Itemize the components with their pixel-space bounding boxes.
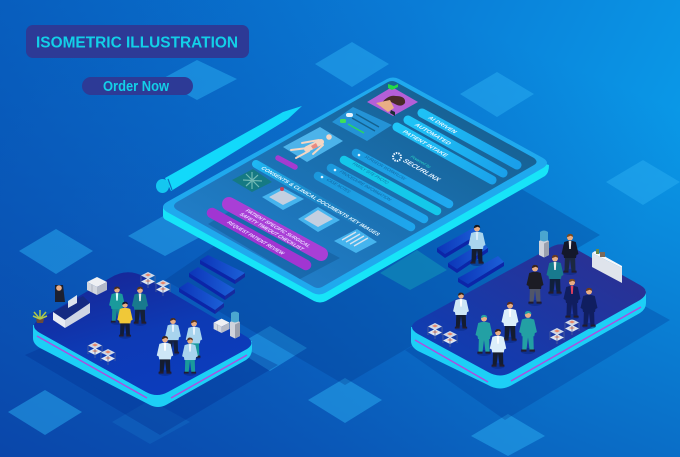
case notes bar: CASE NOTES [324,178,352,194]
securlinx logo [393,153,442,183]
cabinet [592,249,622,283]
consents bar [256,164,381,237]
right stairs [437,228,504,288]
body scan card [283,127,343,162]
AI driven bar [422,113,517,165]
family site photo bar: FAMILY SITE PHOTO [350,162,390,185]
patient intake bar [397,127,492,180]
request patient review bar: REQUEST PATIENT REVIEW [225,221,286,256]
left stairs [179,255,245,314]
patient intake bar: PATIENT INTAKE [400,130,449,158]
title banner [26,25,249,58]
procedure information bar [331,168,424,219]
request patient review bar [212,213,306,265]
document thumbnails [262,187,377,253]
stylus pencil [156,106,302,193]
tablet edge [163,120,549,302]
left platform purple light strips [37,336,247,398]
carts [428,319,579,347]
business group [526,234,598,329]
copier [87,277,107,295]
reception desk [53,285,90,328]
carts [88,272,170,365]
order now button: Order Now [103,79,170,95]
diamond under tablet [380,250,447,290]
clinical group [453,293,537,369]
purple bar shadow [208,205,340,279]
right platform top [412,244,646,376]
avatar tile [367,84,418,116]
case notes bar [318,176,411,227]
staff group near desk [109,287,148,339]
tablet shadow [165,118,600,385]
green scan tile [232,169,272,192]
safety checklist bar: SAFETY TIMEOUT CHECKLIST [237,212,305,252]
order now button [82,77,193,95]
doctors group [157,318,202,376]
tablet screen [174,81,536,288]
doctor on stairs [468,225,486,266]
purple tag [278,158,295,167]
water cooler [539,230,549,258]
left platform shadow [25,300,278,435]
automated bar: AUTOMATED [412,123,452,146]
consents label: CONSENTS & CLINICAL DOCUMENTS KEY IMAGES [259,166,381,237]
patient summary card [332,107,392,141]
left platform [33,272,252,407]
AI driven bar: AI DRIVEN [426,116,458,135]
water cooler [230,312,240,338]
left platform edge [33,325,252,407]
safety checklist bar: PATIENT SPECIFIC SURGICAL [243,209,312,249]
right platform edge [411,290,646,388]
surgeon workflow bar [356,153,449,204]
right platform purple light strips [415,307,641,382]
right platform shadow [405,265,670,420]
right platform [411,230,646,388]
automated bar [408,120,503,173]
tablet frame [163,78,547,294]
tablet [163,78,549,302]
procedure information bar: PROCEDURE INFORMATION [337,170,393,202]
surgeon workflow bar: SURGEON WORKFLOW [362,155,408,181]
securlinx logo: SECURLINX [400,158,442,183]
left platform top [34,272,252,395]
plant [33,310,47,323]
securlinx logo: Powered by [409,155,433,169]
title banner: ISOMETRIC ILLUSTRATION [36,34,238,52]
family site photo bar [344,160,437,211]
